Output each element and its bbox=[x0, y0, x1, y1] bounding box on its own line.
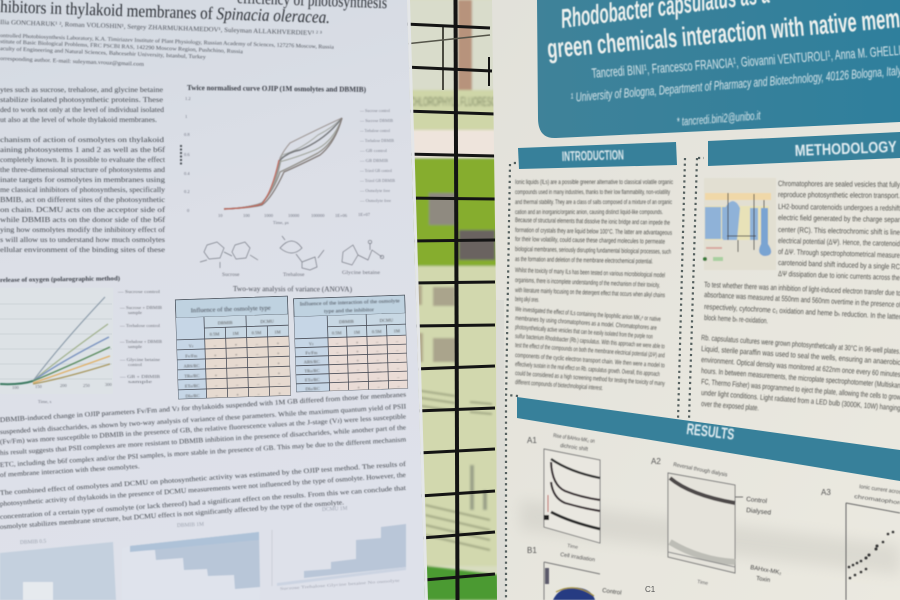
authors and affiliations: orresponding author. E-mail: suleyman.vrouz@gmail.com bbox=[0, 56, 145, 68]
introduction text: could be considered as a high screening method for testing the toxicity of many bbox=[515, 370, 665, 387]
axis labels: 0.8 bbox=[184, 132, 190, 137]
chart legend: — GB DBMIB bbox=[359, 158, 388, 163]
chart title: release of oxygen (polarographic method) bbox=[0, 275, 120, 284]
bar chart: right: DCMU 1M bbox=[322, 506, 348, 513]
table: osmolyte type: DBMIB bbox=[218, 320, 233, 326]
chart title: Twice normalised curve OJIP (1M osmolytes and DBMIB) bbox=[187, 84, 367, 94]
table: osmolyte type: + bbox=[236, 392, 239, 397]
axis labels: 300 bbox=[105, 382, 112, 387]
table: osmolyte type: – bbox=[235, 372, 239, 377]
table: osmolyte and inhibitor interaction: 0.5M bbox=[332, 330, 342, 336]
plot B1: B1 bbox=[527, 546, 537, 555]
table: osmolyte and inhibitor interaction: + bbox=[356, 340, 359, 345]
panel: right poster bbox=[492, 0, 900, 600]
table: osmolyte and inhibitor interaction: – bbox=[356, 376, 360, 381]
axis labels: 10 bbox=[218, 213, 223, 218]
axis labels: 0.6 bbox=[184, 152, 190, 157]
table: osmolyte type: + bbox=[277, 350, 280, 356]
table: osmolyte and inhibitor interaction: ETo/RC bbox=[305, 377, 320, 383]
table: osmolyte and inhibitor interaction: + bbox=[356, 349, 359, 354]
introduction text: compounds used in many industries, thanks to their low flammability, non-volatility bbox=[515, 189, 670, 196]
plot A2: A2 bbox=[651, 457, 661, 466]
results paragraph two bbox=[0, 461, 407, 531]
table: osmolyte type: ABS/RC bbox=[183, 363, 200, 369]
intro paragraph: stabilize isolated photosynthetic proteins. These bbox=[0, 97, 163, 104]
chart legend: — Trehalose control bbox=[359, 128, 391, 133]
table: osmolyte type: – bbox=[256, 371, 260, 376]
intro paragraph: inate targets for osmolytes in membranes using bbox=[0, 177, 166, 184]
axis labels: 1E+07 bbox=[358, 212, 371, 217]
methodology text bbox=[701, 179, 900, 413]
table: osmolyte type: – bbox=[255, 341, 259, 346]
introduction text: being alkyl ones. bbox=[515, 296, 539, 304]
results paragraph one: of membrane interaction with these osmolytes. bbox=[0, 463, 140, 479]
introduction text bbox=[514, 179, 674, 392]
authors and affiliations: Ilia GONCHARUK¹ ², Roman VOLOSHIN¹, Sergey ZHARMUKHAMEDOV¹, Suleyman ALLAKHVERDIEV¹ ² ³ bbox=[0, 19, 322, 37]
plot B1: Cell irradiation bbox=[560, 552, 595, 563]
authors and affiliations bbox=[0, 19, 335, 68]
intro paragraph: while DBMIB acts on the donor side of the b6f bbox=[0, 217, 166, 224]
intro paragraph: chanism of action of osmolytes on thylakoid bbox=[0, 137, 165, 144]
introduction heading bbox=[518, 142, 677, 169]
plot B1: Control bbox=[602, 588, 622, 597]
axis labels: 150 bbox=[35, 384, 42, 389]
axis labels: 100 bbox=[12, 385, 20, 390]
chart legend: — Trehalose + DBMIB bbox=[119, 339, 162, 344]
introduction text: different compounds of biotechnological interest. bbox=[515, 379, 603, 392]
chart legend: — GB control bbox=[359, 148, 388, 153]
fold shadow bbox=[520, 500, 900, 575]
introduction text: as the formation and deletion of the membrane electrochemical potential. bbox=[515, 256, 653, 265]
axis labels: 100000 bbox=[311, 213, 325, 218]
table: osmolyte type: Vᴊ bbox=[189, 343, 194, 349]
chart legend: sample bbox=[128, 344, 142, 349]
header banner bbox=[537, 0, 900, 138]
table: osmolyte and inhibitor interaction: 1M bbox=[394, 328, 400, 334]
table: osmolyte and inhibitor interaction: + bbox=[357, 385, 360, 390]
intro paragraph: me classical inhibitors of photosynthesis, specifically bbox=[0, 187, 166, 194]
OJIP line chart bbox=[181, 84, 395, 226]
plot A2: Reversal through dialysis bbox=[673, 462, 728, 478]
axis labels bbox=[12, 382, 112, 405]
chart legend: sample bbox=[128, 310, 142, 315]
table: osmolyte and inhibitor interaction: + bbox=[356, 358, 359, 363]
chart legend: — Trehalose control bbox=[119, 323, 161, 328]
results paragraph two: osmolyte stabilizes membrane structure, but DCMU effect is not significantly affected by the type of the osmolyte. bbox=[0, 499, 345, 531]
intro paragraph: ut also at the level of whole thylakoid membranes. bbox=[0, 117, 157, 124]
table: osmolyte and inhibitor interaction: – bbox=[376, 366, 380, 371]
intro paragraph bbox=[0, 87, 166, 254]
table: osmolyte type: + bbox=[215, 373, 218, 378]
chart legend: — Trehalose DBMIB bbox=[359, 138, 394, 143]
table: osmolyte and inhibitor interaction: – bbox=[375, 339, 379, 344]
axis labels: 0.2 bbox=[184, 189, 190, 194]
background poster behind the grid bbox=[400, 0, 500, 600]
intro paragraph: ytes such as sucrose, trehalose, and glycine betaine bbox=[0, 87, 163, 94]
results paragraph one: suspended with disaccharides, as shown by two-way analysis of variance of these parameters. While the maximum quantum yield of PSII bbox=[0, 403, 407, 436]
bar chart: left bbox=[0, 539, 116, 600]
plot A2: Dialysed bbox=[746, 507, 772, 517]
plot A1: Rise of BAHxx-MK₂ on bbox=[553, 433, 595, 445]
results paragraph one: DBMIB-induced change in OJIP parameters Fv/Fm and Vᴊ for thylakoids suspended with 1M GB differed from those for membranes bbox=[0, 391, 407, 424]
chart legend: — Trizol GB DBMIB bbox=[359, 178, 395, 183]
plot A3: chromatophore bbox=[854, 494, 900, 507]
intro paragraph: ded to work not only at the level of individual isolated bbox=[0, 107, 165, 114]
table: osmolyte type: 1M bbox=[274, 329, 281, 335]
introduction text: cation and an inorganic/organic anion, causing distinct liquid-like compounds. bbox=[515, 209, 663, 216]
authors and affiliations: aculty of Engineering and Natural Sciences, Bahcesehir University, Istanbul, Turkey bbox=[0, 45, 206, 61]
bar chart: middle: DBMIB 1M bbox=[177, 522, 204, 529]
curves bbox=[224, 118, 342, 209]
plot A1: A1 bbox=[527, 436, 537, 445]
intro paragraph: on chain. DCMU acts on the acceptor side of bbox=[0, 207, 166, 214]
table: osmolyte and inhibitor interaction: – bbox=[395, 356, 400, 361]
axis labels: Time, μs bbox=[273, 220, 289, 226]
introduction text: photosynthetically active vesicles that can be easily isolated from the purple non bbox=[515, 324, 653, 341]
table: osmolyte type: Fv/Fm bbox=[185, 353, 198, 359]
table: osmolyte type: + bbox=[278, 390, 281, 396]
plot A1 bbox=[527, 433, 600, 551]
table: osmolyte and inhibitor interaction: – bbox=[395, 338, 399, 344]
introduction text: We investigated the effect of ILs containing the lipophilic anion MK₂ⁿ or native bbox=[515, 306, 661, 323]
intro paragraph: ellular environment of the binding sites of these bbox=[0, 247, 165, 254]
results paragraph one: his result suggests that PSII complexes are more resistant to DBMIB inhibition in the presence of disaccharides, while another part of the bbox=[0, 424, 406, 457]
chart legend bbox=[117, 289, 162, 384]
introduction text: components of the cyclic electron transport chain. We then were a model to bbox=[515, 352, 665, 369]
axis labels: 10000 bbox=[288, 213, 300, 218]
plot A3: A3 bbox=[821, 488, 831, 497]
molecule labels bbox=[222, 270, 381, 278]
axis labels: 1000 bbox=[264, 213, 274, 218]
results heading bbox=[517, 397, 900, 481]
introduction text: test the effect of the compounds on both the membrane electrical potential (ΔΨ) and bbox=[515, 342, 665, 359]
table: osmolyte and inhibitor interaction: – bbox=[375, 348, 379, 353]
chart legend: — Glycine betaine bbox=[119, 357, 160, 362]
introduction text: organisms, there is incomplete understanding of the mechanism of their toxicity, bbox=[515, 277, 660, 289]
wire grid bbox=[405, 0, 495, 600]
plot A1: dichroic shift bbox=[560, 443, 589, 453]
osmolyte molecule structures bbox=[200, 236, 384, 270]
axis labels: 100 bbox=[243, 213, 250, 218]
table: osmolyte type: DCMU bbox=[260, 319, 275, 324]
table: osmolyte and inhibitor interaction: ABS/RC bbox=[304, 359, 320, 365]
table: osmolyte and inhibitor interaction: DBMIB bbox=[339, 319, 354, 324]
chart legend: — GB + DBMIB bbox=[119, 374, 160, 379]
table: osmolyte and inhibitor interaction: – bbox=[335, 340, 339, 345]
molecule labels: Glycine betaine bbox=[342, 270, 381, 276]
introduction text: Whilst the toxicity of many ILs has been tested on various microbiological model bbox=[515, 267, 665, 279]
introduction text: Ionic liquids (ILs) are a possible greener alternative to classical volatile organic bbox=[515, 179, 674, 186]
background poster behind the grid: CHLOROPHYLL FLUORESC bbox=[410, 94, 496, 109]
authors and affiliations: ontrolled Photobiosynthesis Laboratory, K.A. Timiriazev Institute of Plant Physiology, Russian Academy of Sciences, 127276 Moscow, Russia bbox=[0, 32, 335, 51]
table: osmolyte and inhibitor interaction: – bbox=[396, 365, 400, 370]
introduction text: membranes by using chromatophores as a model. Chromatophores are bbox=[515, 315, 657, 332]
table: osmolyte and inhibitor interaction: – bbox=[395, 347, 399, 353]
introduction text: and thermal stability. They are a class of salts composed of a mixture of an organic bbox=[515, 199, 672, 206]
chart legend: — Sucrose + DBMIB bbox=[119, 305, 162, 310]
table: osmolyte type: – bbox=[255, 351, 259, 356]
table: osmolyte and inhibitor interaction: – bbox=[396, 374, 400, 379]
results paragraph one bbox=[0, 391, 407, 479]
chart legend: — Osmolyte free bbox=[359, 198, 391, 203]
introduction text: for their low volatility, could cause these charged molecules to permeate bbox=[515, 236, 665, 246]
axis labels: 1E+06 bbox=[335, 213, 348, 218]
chart legend: — Sucrose control bbox=[359, 108, 391, 113]
intro paragraph: BMIB, act on different sites of the photosynthetic bbox=[0, 197, 165, 204]
table: osmolyte type: + bbox=[214, 353, 217, 358]
panel: left poster bbox=[0, 0, 428, 600]
plot A3 bbox=[821, 484, 900, 600]
intro paragraph: aining photosystems 1 and 2 as well as the b6f bbox=[0, 147, 166, 154]
plot A2 bbox=[651, 457, 783, 587]
molecule labels: Trehalose bbox=[283, 272, 305, 278]
plot A2: Toxin bbox=[756, 576, 770, 584]
table: osmolyte type: DIo/RC bbox=[185, 393, 200, 399]
authors and affiliations: stitute of Basic Biological Problems, FRC PSCBI RAS, 142290 Moscow Region, Pushchino, Russia bbox=[0, 38, 244, 55]
table: osmolyte type: – bbox=[213, 363, 218, 368]
plot B1 bbox=[527, 546, 622, 600]
chart legend: sample bbox=[128, 379, 152, 384]
table: osmolyte type: – bbox=[235, 382, 239, 387]
axis labels: Time, s bbox=[38, 399, 52, 405]
table: osmolyte and inhibitor interaction: 1M bbox=[354, 330, 360, 335]
table: osmolyte type: ETo/RC bbox=[185, 383, 200, 389]
introduction text: sulfur bacterium Rhodobacter (Rb.) capsulatus. With this approach we were able to bbox=[515, 333, 665, 350]
table: osmolyte and inhibitor interaction: TRo/RC bbox=[304, 368, 320, 374]
axis labels: 1.2 bbox=[185, 96, 191, 101]
introduction text: effectively sustain in the real effect on Rb. capsulatus growth. Overall, this approach bbox=[515, 361, 660, 378]
table: osmolyte and inhibitor interaction: – bbox=[336, 376, 340, 381]
chart legend: — Sucrose control bbox=[117, 289, 161, 294]
table: osmolyte and inhibitor interaction: Vᴊ bbox=[309, 341, 314, 346]
dotted column borders bbox=[506, 158, 704, 600]
table: osmolyte type: – bbox=[213, 343, 217, 348]
bar chart: middle bbox=[122, 522, 260, 600]
introduction text: Because of structural elements that dissolve the ionic bridge and can impede the bbox=[515, 217, 670, 227]
axis labels: 250 bbox=[83, 383, 90, 388]
table: osmolyte type: TRo/RC bbox=[184, 373, 200, 379]
table: osmolyte and inhibitor interaction: – bbox=[376, 375, 380, 380]
oxygen evolution line chart bbox=[0, 275, 162, 405]
methodology text: over the exposed plate. bbox=[701, 399, 759, 413]
table: osmolyte and inhibitor interaction bbox=[294, 295, 408, 392]
table: osmolyte and inhibitor interaction: Influence of the interaction of the osmolyte bbox=[300, 297, 400, 308]
table: osmolyte type: – bbox=[214, 383, 218, 388]
table: osmolyte and inhibitor interaction: DIo/RC bbox=[305, 386, 320, 392]
table: osmolyte and inhibitor interaction: – bbox=[336, 385, 341, 390]
email: * tancredi.bini2@unibo.it bbox=[676, 108, 761, 129]
table: osmolyte type: 1M bbox=[232, 331, 239, 336]
intro paragraph: completely known. It is possible to evaluate the effect bbox=[0, 157, 165, 164]
results paragraph two: photosynthetic activity of thylakoids in the presence of DCMU measurements were not influenced by the type of osmolyte. However, the bbox=[0, 472, 406, 508]
intro paragraph: the three-dimensional structure of photosystems and bbox=[0, 167, 166, 174]
chart legend: — Sucrose DBMIB bbox=[359, 118, 393, 123]
methodology heading bbox=[708, 132, 900, 166]
table: osmolyte type bbox=[175, 296, 291, 399]
table: osmolyte and inhibitor interaction: – bbox=[335, 358, 340, 363]
table: osmolyte type: – bbox=[277, 380, 281, 386]
table: osmolyte and inhibitor interaction: – bbox=[356, 367, 360, 372]
table: osmolyte type: + bbox=[235, 352, 238, 357]
table: osmolyte type: 0.5M bbox=[252, 330, 261, 335]
bar chart: right: Sucrose Trehalose Glycine betaine No osmolyte bbox=[280, 578, 400, 591]
methodology text: block heme bₕ re-oxidation. bbox=[704, 313, 768, 325]
results paragraph two: concentration of a certain type of osmolyte (or lack thereof) had a significant effect on the results. From this we can conclude that bbox=[0, 485, 406, 521]
table: osmolyte type: – bbox=[214, 393, 219, 398]
plot A2: BAHxx-MK₂ bbox=[750, 565, 783, 577]
table: osmolyte and inhibitor interaction: – bbox=[336, 367, 340, 372]
table: osmolyte and inhibitor interaction: DCMU bbox=[380, 318, 394, 323]
results paragraph one: (Fv/Fm) was more susceptible to DBMIB in the presence of GB, the relative fluorescence values at the J-stage (Vᴊ) were less susceptible bbox=[0, 413, 406, 446]
introduction text: with literature mainly focusing on the detergent effect that occurs when alkyl chains bbox=[514, 287, 666, 299]
table: osmolyte and inhibitor interaction: – bbox=[335, 349, 339, 354]
bar chart: right bbox=[272, 506, 406, 591]
axis labels: 200 bbox=[60, 383, 68, 388]
table: osmolyte and inhibitor interaction: 0.5M bbox=[372, 329, 382, 334]
table: osmolyte type: + bbox=[235, 342, 238, 347]
table: osmolyte and inhibitor interaction: Fv/Fm bbox=[305, 350, 318, 355]
table: osmolyte type: 0.5M bbox=[210, 331, 219, 337]
axis labels: 1 bbox=[185, 114, 187, 119]
plot A2: Time bbox=[697, 579, 709, 587]
chart legend: — Osmolyte free bbox=[359, 188, 390, 193]
chart legend: — Trizol GB control bbox=[359, 168, 393, 173]
table: osmolyte type: – bbox=[255, 361, 259, 366]
table: osmolyte and inhibitor interaction: – bbox=[376, 384, 381, 389]
table: osmolyte type: + bbox=[277, 340, 280, 346]
plot A1: Time bbox=[567, 543, 579, 551]
table: osmolyte type: – bbox=[256, 381, 260, 386]
intro paragraph: ying how osmolytes modify the inhibitory effect of bbox=[0, 227, 166, 234]
axis labels: 0.4 bbox=[184, 171, 190, 176]
molecule labels: Sucrose bbox=[222, 272, 240, 278]
results paragraph two: The combined effect of osmolytes and DCMU on photosynthetic activity was estimated by the OJIP test method. The results of bbox=[0, 461, 407, 497]
results paragraph one: ETC, including the b6f complex and/or the PSI samples, is more stable in the presence of GB. This may be due to the different mechanism bbox=[0, 436, 407, 469]
intro paragraph: s will allow us to understand how much osmolytes bbox=[0, 237, 165, 244]
anova title: Two-way analysis of variance (ANOVA) bbox=[233, 285, 353, 294]
table: osmolyte type: Influence of the osmolyte type bbox=[191, 305, 271, 314]
table: osmolyte type: + bbox=[277, 360, 280, 366]
table: osmolyte and inhibitor interaction: – bbox=[396, 383, 401, 388]
introduction text: formation of crystals they are liquid below 100°C. The latter are advantageous bbox=[515, 226, 673, 237]
results heading: RESULTS bbox=[686, 421, 735, 444]
table: osmolyte and inhibitor interaction: – bbox=[375, 357, 380, 362]
table: osmolyte type: – bbox=[256, 391, 260, 396]
table: osmolyte and inhibitor interaction: type and the inhibitor bbox=[324, 307, 374, 315]
data lines bbox=[0, 297, 110, 384]
axis labels bbox=[181, 96, 371, 226]
axis labels: 0 bbox=[187, 208, 190, 213]
introduction heading: INTRODUCTION bbox=[562, 147, 624, 164]
introduction text: biological membranes, seriously disrupting fundamental biological processes, such bbox=[515, 246, 671, 256]
table: osmolyte type: – bbox=[234, 362, 239, 367]
bar chart: left: DBMIB 0.5 bbox=[20, 539, 47, 546]
plot C1 label: C1 bbox=[645, 585, 656, 594]
table: osmolyte type: + bbox=[277, 370, 281, 376]
chart legend: control bbox=[128, 362, 143, 367]
plot A2: Control bbox=[746, 496, 768, 505]
chart legend bbox=[359, 108, 395, 203]
methodology diagram bbox=[703, 178, 776, 270]
